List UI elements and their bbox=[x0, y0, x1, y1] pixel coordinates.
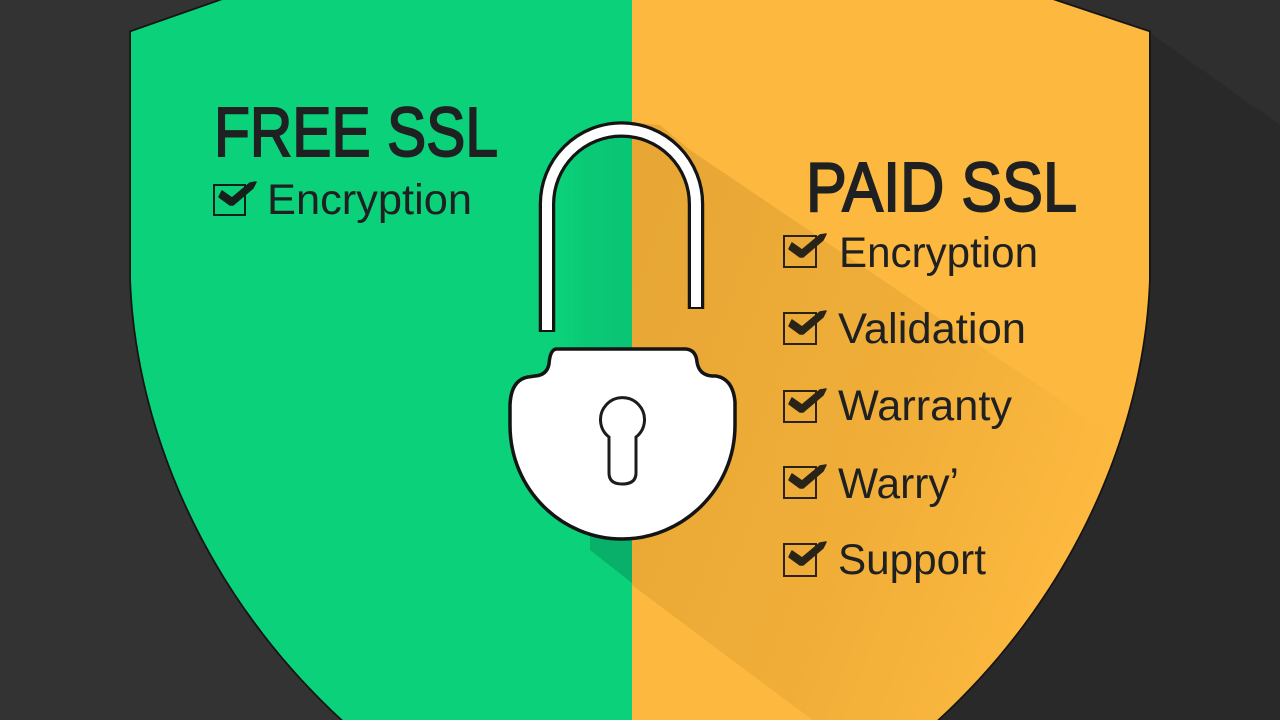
label: Support bbox=[838, 536, 986, 584]
label: Warranty bbox=[838, 382, 1012, 430]
label: Warry’ bbox=[838, 460, 959, 508]
paid item: encryption bbox=[784, 229, 1038, 277]
checkbox icon bbox=[214, 182, 256, 215]
lock body bbox=[510, 349, 735, 539]
lock shadow under body on green half bbox=[590, 535, 632, 583]
heading: paid SSL: PAID SSL bbox=[806, 148, 1077, 226]
free item: encryption bbox=[214, 176, 472, 224]
checkbox icon bbox=[784, 465, 826, 498]
paid item: garbled warranty bbox=[784, 460, 959, 508]
paid item: validation bbox=[784, 305, 1026, 353]
label: Validation bbox=[838, 305, 1026, 353]
checkbox icon bbox=[784, 389, 826, 422]
heading: free SSL: FREE SSL bbox=[214, 93, 498, 171]
keyhole bbox=[600, 398, 644, 484]
free SSL panel bbox=[214, 93, 498, 224]
shield left half: free bbox=[100, 0, 632, 720]
paid item: warranty bbox=[784, 382, 1012, 430]
checkbox icon bbox=[784, 311, 826, 344]
shackle shadow on green half bbox=[560, 122, 632, 350]
label: Encryption bbox=[839, 229, 1038, 277]
shield right half: paid bbox=[632, 0, 1172, 720]
paid item: support bbox=[784, 536, 986, 584]
paid SSL panel bbox=[784, 148, 1077, 584]
padlock bbox=[510, 130, 735, 539]
shackle bbox=[547, 130, 696, 332]
checkbox icon bbox=[784, 542, 826, 576]
shield outline bbox=[131, 0, 1149, 720]
background shadow cast by shield bbox=[900, 32, 1280, 720]
checkbox icon bbox=[784, 234, 826, 267]
shackle inner bbox=[547, 130, 696, 330]
label: Encryption bbox=[267, 176, 472, 224]
background top right band bbox=[1040, 0, 1280, 125]
lock shadow on orange half bbox=[632, 122, 1004, 720]
